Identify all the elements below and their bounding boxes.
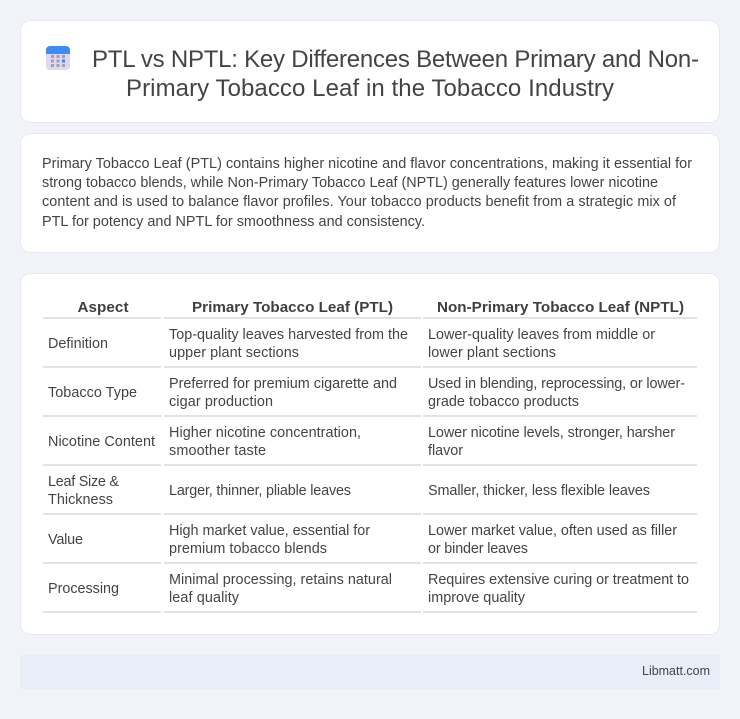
row: Leaf Size and Thickness: Thickness (48, 492, 113, 508)
row: Tobacco Type: Tobacco Type (48, 385, 137, 401)
footer bar (20, 655, 720, 689)
row: Definition: Lower-quality leaves from middle or (428, 327, 655, 343)
comparison table panel (20, 274, 720, 634)
row: Nicotine Content: Lower nicotine levels, stronger, harsher (428, 425, 675, 441)
row: Processing: Requires extensive curing or treatment to (428, 572, 689, 588)
table header (78, 299, 684, 316)
row: Processing (48, 572, 689, 606)
row: Leaf Size and Thickness: Smaller, thicker, less flexible leaves (428, 483, 650, 499)
row: Definition: Top-quality leaves harvested from the (169, 327, 408, 343)
row: Tobacco Type: Used in blending, reprocessing, or lower- (428, 376, 685, 392)
footer credit: Libmatt.com (642, 664, 710, 678)
intro paragraph: strong tobacco blends, while Non-Primary Tobacco Leaf (NPTL) generally features lower nicotine (42, 175, 658, 191)
row: Definition: lower plant sections (428, 345, 556, 361)
row: Processing: improve quality (428, 590, 526, 606)
row: Value (48, 523, 677, 557)
row: Processing: Minimal processing, retains natural (169, 572, 392, 588)
row: Nicotine Content: Higher nicotine concentration, (169, 425, 361, 441)
intro paragraph: PTL for potency and NPTL for smoothness and consistency. (42, 214, 425, 230)
intro paragraph (42, 156, 692, 230)
row: Nicotine Content (48, 425, 675, 459)
row: Value: or binder leaves (428, 541, 528, 557)
row: Processing: leaf quality (169, 590, 240, 606)
row: Processing: Processing (48, 581, 119, 597)
row: Definition: Definition (48, 336, 108, 352)
header panel (20, 20, 720, 122)
intro paragraph: content and is used to balance flavor profiles. Your tobacco products benefit from a strategic mix of (42, 194, 677, 210)
row: Definition: upper plant sections (169, 345, 299, 361)
intro paragraph: Primary Tobacco Leaf (PTL) contains higher nicotine and flavor concentrations, making it essential for (42, 156, 692, 172)
title: PTL vs NPTL: Key Differences Between Primary and Non- (92, 46, 699, 73)
row: Value: Lower market value, often used as filler (428, 523, 677, 539)
table header: Aspect (78, 299, 128, 316)
row: Tobacco Type: grade tobacco products (428, 394, 579, 410)
row: Definition (48, 327, 655, 361)
row: Value: Value (48, 532, 83, 548)
intro text panel (20, 134, 720, 252)
title (92, 46, 699, 102)
table header: Primary Tobacco Leaf (PTL) (192, 299, 393, 316)
row: Leaf Size and Thickness (48, 474, 650, 508)
row: Tobacco Type: cigar production (169, 394, 273, 410)
icon: calendar (46, 46, 70, 70)
table header: Non-Primary Tobacco Leaf (NPTL) (437, 299, 684, 316)
title: Primary Tobacco Leaf in the Tobacco Industry (126, 75, 614, 102)
row: Value: premium tobacco blends (169, 541, 327, 557)
row: Tobacco Type (48, 376, 685, 410)
row: Tobacco Type: Preferred for premium cigarette and (169, 376, 397, 392)
row: Leaf Size and Thickness: Larger, thinner, pliable leaves (169, 483, 351, 499)
row: Nicotine Content: Nicotine Content (48, 434, 155, 450)
row: Value: High market value, essential for (169, 523, 370, 539)
row: Leaf Size and Thickness: Leaf Size & (48, 474, 119, 490)
row: Nicotine Content: smoother taste (169, 443, 266, 459)
row: Nicotine Content: flavor (428, 443, 463, 459)
